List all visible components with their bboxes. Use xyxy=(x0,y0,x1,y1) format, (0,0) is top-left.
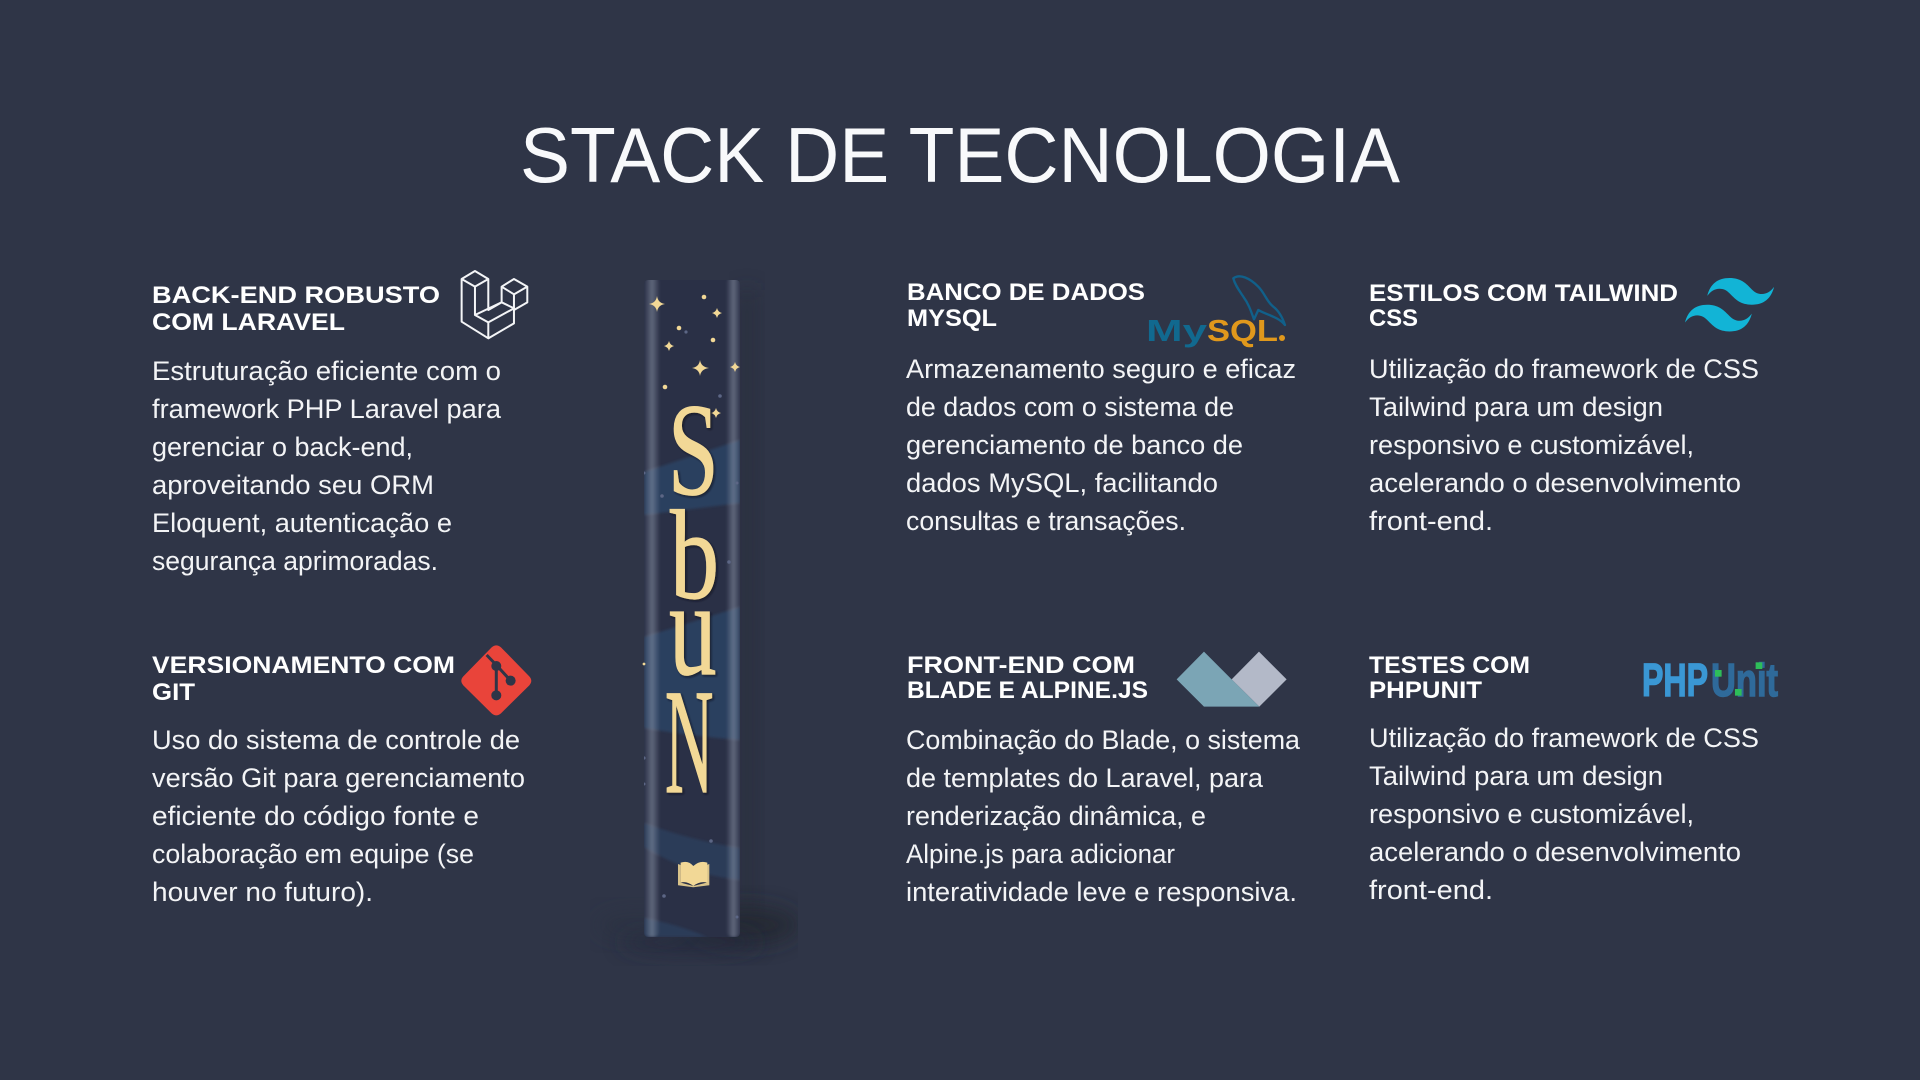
text block: Git: eficiente do código fonte e xyxy=(152,801,479,831)
text block: Git xyxy=(152,725,525,907)
title: STACK DE TECNOLOGIA xyxy=(520,111,1400,199)
text block: back-end: Eloquent, autenticação e xyxy=(152,508,452,538)
text block: PHPUnit: front-end. xyxy=(1369,875,1493,905)
text block: Blade: renderização dinâmica, e xyxy=(906,801,1206,831)
text block: MySQL: consultas e transações. xyxy=(906,506,1186,536)
icon: Laravel xyxy=(462,271,527,338)
heading: MySQL xyxy=(907,279,1145,332)
icon: MySQL logo: My xyxy=(1146,313,1208,348)
icon: PHPUnit logo: PHP xyxy=(1642,654,1708,706)
panel: Tailwind xyxy=(1369,278,1774,536)
text block: Blade: de templates do Laravel, para xyxy=(906,763,1264,793)
text block: Blade: interatividade leve e responsiva. xyxy=(906,877,1297,907)
text block: PHPUnit: Tailwind para um design xyxy=(1369,761,1663,791)
text block: Tailwind: front-end. xyxy=(1369,506,1493,536)
icon: Tailwind xyxy=(1685,278,1774,331)
text block: Blade xyxy=(906,725,1301,907)
text block: back-end: segurança aprimoradas. xyxy=(152,546,438,576)
text block: back-end: gerenciar o back-end, xyxy=(152,432,413,462)
spine title letters xyxy=(665,376,719,826)
heading: Blade xyxy=(907,652,1148,704)
spine title letters: N xyxy=(665,659,713,826)
spine title letters: u xyxy=(669,555,716,704)
text block: back-end: aproveitando seu ORM xyxy=(152,470,434,500)
text block: Tailwind: responsivo e customizável, xyxy=(1369,430,1694,460)
icon: PHPUnit logo: Unit xyxy=(1711,654,1778,706)
icon: Alpine xyxy=(1177,652,1287,707)
heading: Git xyxy=(152,652,455,706)
text block: back-end xyxy=(152,356,502,576)
spine title letters: S xyxy=(668,376,719,523)
heading: Tailwind: CSS xyxy=(1369,305,1418,332)
heading: back-end: COM LARAVEL xyxy=(152,309,345,336)
heading: MySQL: MYSQL xyxy=(907,305,997,332)
panel: PHPUnit xyxy=(1369,652,1778,905)
text block: Git: colaboração em equipe (se xyxy=(152,839,474,869)
text block: Tailwind xyxy=(1369,354,1759,536)
text block: Tailwind: acelerando o desenvolvimento xyxy=(1369,468,1741,498)
heading: back-end: BACK-END ROBUSTO xyxy=(152,282,440,309)
spine title letters: b xyxy=(670,485,719,626)
text block: MySQL: gerenciamento de banco de xyxy=(906,430,1243,460)
heading: back-end xyxy=(152,282,440,336)
heading: Tailwind: ESTILOS COM TAILWIND xyxy=(1369,280,1678,307)
text block: Git: houver no futuro). xyxy=(152,877,373,907)
icon: open book xyxy=(678,862,709,887)
text block: PHPUnit: responsivo e customizável, xyxy=(1369,799,1694,829)
heading: Tailwind xyxy=(1369,280,1678,332)
text block: MySQL xyxy=(906,354,1296,536)
spine shadow xyxy=(654,722,796,954)
panel: Blade and Alpine xyxy=(906,652,1301,907)
text block: back-end: Estruturação eficiente com o xyxy=(152,356,501,386)
text block: Git: Uso do sistema de controle de xyxy=(152,725,520,755)
text block: Tailwind: Tailwind para um design xyxy=(1369,392,1663,422)
heading: Blade: BLADE E ALPINE.JS xyxy=(907,677,1148,704)
heading: Blade: FRONT-END COM xyxy=(907,652,1135,679)
heading: Git: VERSIONAMENTO COM xyxy=(152,652,455,679)
panel: versionamento Git xyxy=(152,645,531,907)
text block: Blade: Combinação do Blade, o sistema xyxy=(906,725,1301,755)
text block: PHPUnit xyxy=(1369,723,1759,905)
book spine illustration xyxy=(642,280,796,954)
heading: PHPUnit: TESTES COM xyxy=(1369,652,1530,679)
text block: MySQL: Armazenamento seguro e eficaz xyxy=(906,354,1296,384)
heading: PHPUnit: PHPUNIT xyxy=(1369,677,1482,704)
heading: Git: GIT xyxy=(152,679,195,706)
spine body xyxy=(642,277,740,937)
icon: MySQL logo xyxy=(1146,276,1285,348)
icon: PHPUnit logo xyxy=(1642,654,1778,706)
stars xyxy=(643,295,740,665)
text block: MySQL: de dados com o sistema de xyxy=(906,392,1234,422)
text block: Blade: Alpine.js para adicionar xyxy=(906,839,1175,869)
panel: MySQL xyxy=(906,276,1296,536)
panel: back-end Laravel xyxy=(152,271,527,576)
heading: MySQL: BANCO DE DADOS xyxy=(907,279,1145,306)
icon: MySQL logo: SQL xyxy=(1207,313,1278,348)
heading: PHPUnit xyxy=(1369,652,1530,704)
icon: Git xyxy=(461,645,531,715)
text block: Tailwind: Utilização do framework de CSS xyxy=(1369,354,1759,384)
text block: Git: versão Git para gerenciamento xyxy=(152,763,525,793)
text block: PHPUnit: Utilização do framework de CSS xyxy=(1369,723,1759,753)
text block: PHPUnit: acelerando o desenvolvimento xyxy=(1369,837,1741,867)
text block: MySQL: dados MySQL, facilitando xyxy=(906,468,1218,498)
text block: back-end: framework PHP Laravel para xyxy=(152,394,502,424)
